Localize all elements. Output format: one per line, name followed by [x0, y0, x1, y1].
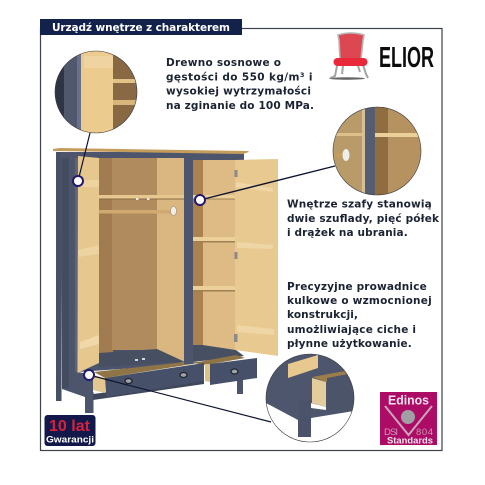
badge: warranty: 10 lat — [49, 418, 91, 435]
header — [40, 19, 242, 35]
left rear leg — [56, 152, 62, 401]
icon: chair logo — [329, 33, 368, 80]
text block: wood: gęstości do 550 kg/m³ i — [166, 72, 312, 84]
circle detail: interior — [333, 107, 421, 195]
right bay interior — [193, 160, 203, 350]
text block: guides: Precyzyjne prowadnice — [287, 281, 427, 293]
front leg — [85, 392, 94, 413]
circle outline 2 — [333, 107, 421, 195]
badge: Edinos standards: Edinos — [388, 392, 429, 408]
right leg — [237, 376, 243, 394]
left drawer front — [105, 363, 204, 397]
badge: Edinos standards — [380, 392, 437, 446]
left drawer side — [93, 375, 105, 393]
callout line 3 — [89, 375, 271, 422]
circle detail: door — [55, 50, 137, 134]
badge: Edinos standards: 804 — [416, 427, 433, 438]
door hinges — [234, 170, 238, 342]
badge: warranty: Gwarancji — [46, 434, 94, 444]
text block: guides: umożliwiające ciche i — [287, 324, 416, 336]
center post — [184, 157, 193, 364]
text block: guides: płynne użytkowanie. — [287, 338, 412, 350]
right bay shelves — [193, 195, 235, 292]
logo text: ELIOR — [379, 42, 434, 74]
frame — [40, 28, 442, 450]
circle outline 3 — [266, 354, 354, 442]
text block: interior — [287, 198, 440, 239]
right door — [235, 159, 278, 356]
right drawer front — [210, 358, 257, 385]
wardrobe illustration — [53, 148, 278, 413]
callout line 2 — [200, 166, 335, 200]
badge: Edinos standards: Standards — [387, 436, 433, 446]
text block: wood: na zginanie do 100 MPa. — [166, 100, 314, 112]
marker dot 3 — [84, 370, 94, 380]
top board — [53, 148, 249, 154]
drawer spacer — [205, 364, 210, 382]
left door — [78, 156, 99, 373]
text block: wood: wysokiej wytrzymałości — [166, 86, 311, 98]
text block: guides — [287, 281, 432, 350]
badge: Edinos standards: DSI — [384, 427, 398, 438]
right bay floor — [193, 345, 244, 362]
floor pegs — [135, 358, 145, 361]
hanging rail — [99, 206, 176, 216]
left bay interior — [99, 158, 113, 354]
marker dot 1 — [73, 176, 83, 186]
header: Urządź wnętrze z charakterem — [52, 22, 230, 34]
left drawer interior — [94, 362, 205, 378]
circle detail: drawer — [266, 354, 354, 442]
top shelf left — [99, 195, 184, 200]
text block: interior: Wnętrze szafy stanowią — [287, 198, 432, 210]
right drawer interior — [193, 355, 245, 365]
text block: guides: kulkowe o wzmocnionej — [287, 295, 432, 307]
text block: wood — [166, 57, 314, 112]
under drawer rail — [93, 380, 204, 400]
drawer knobs — [125, 369, 238, 384]
text block: wood: Drewno sosnowe o — [166, 57, 281, 69]
left bay floor — [99, 349, 185, 367]
circle outline 1 — [55, 51, 137, 133]
marker dot 2 — [195, 195, 205, 205]
callout line 1 — [78, 133, 90, 181]
text block: interior: dwie szuflady, pięć półek — [287, 213, 440, 225]
front navy body — [61, 152, 244, 397]
text block: guides: konstrukcji, — [287, 309, 358, 321]
text block: interior: i drążek na ubrania. — [287, 227, 408, 239]
badge: warranty — [44, 415, 96, 446]
